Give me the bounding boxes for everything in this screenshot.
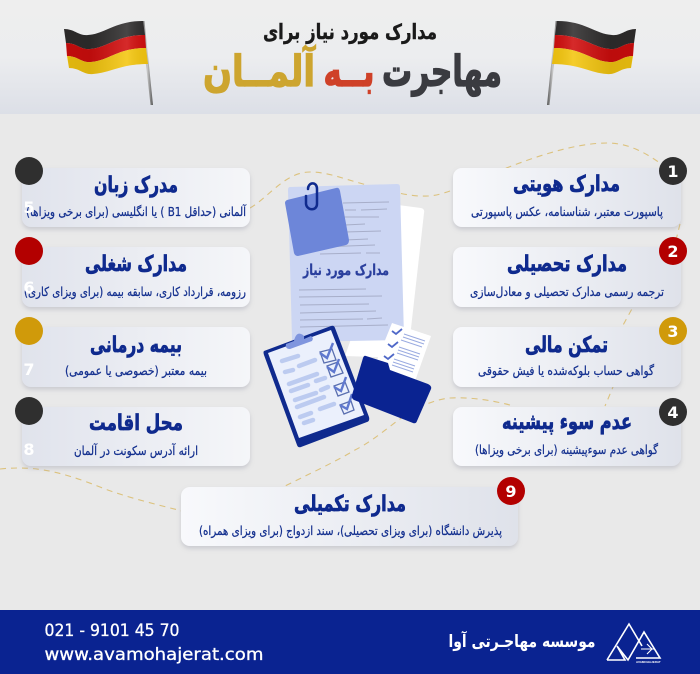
card 1: identity documents: [453, 157, 687, 227]
icon: paperclip: [306, 183, 317, 209]
card 7: health insurance: بیمه درمانی: [90, 333, 182, 358]
website: www.avamohajerat.com: [44, 645, 264, 665]
white back sheet: [345, 205, 424, 358]
card 4: no criminal record: عدم سوء پیشینه: [502, 410, 632, 435]
card 2: educational documents: ترجمه رسمی مدارک تحصیلی و معادل‌سازی: [470, 284, 664, 300]
card 7: health insurance: 7: [23, 360, 35, 379]
card 6: employment documents: 6: [23, 278, 35, 297]
checklist paper: [373, 323, 431, 384]
header band: [0, 0, 700, 114]
card 5: language certificate: [15, 157, 250, 227]
card 9: supplementary documents: 9: [505, 482, 517, 501]
card 4: no criminal record: 4: [667, 403, 679, 422]
heading: main title: [203, 45, 502, 97]
card 3: financial means: گواهی حساب بلوکه‌شده یا فیش حقوقی: [478, 363, 654, 379]
institute name: موسسه مهاجـرتی آوا: [448, 630, 596, 652]
card 3: financial means: [453, 317, 687, 387]
card 7: health insurance: بیمه معتبر (خصوصی یا عمومی): [65, 363, 207, 379]
icon: right German flag: [547, 21, 636, 105]
folder: [352, 356, 431, 423]
card 8: place of residence: ارائه آدرس سکونت در آلمان: [74, 443, 198, 459]
card 4: no criminal record: [453, 398, 687, 466]
card 9: supplementary documents: [181, 477, 525, 546]
card 5: language certificate: 5: [23, 198, 35, 217]
card 1: identity documents: پاسپورت معتبر، شناسنامه، عکس پاسپورتی: [471, 204, 663, 220]
clipboard: [264, 326, 369, 447]
card 6: employment documents: رزومه، قرارداد کاری، سابقه بیمه (برای ویزای کاری): [24, 284, 246, 300]
card 6: employment documents: [15, 237, 250, 307]
card 3: financial means: تمکن مالی: [525, 333, 608, 358]
card 6: employment documents: مدارک شغلی: [85, 252, 187, 277]
card 1: identity documents: 1: [667, 162, 679, 181]
card 8: place of residence: محل اقامت: [89, 411, 183, 436]
document label: مدارک مورد نیاز: [302, 261, 389, 279]
card 8: place of residence: 8: [23, 440, 35, 459]
blue document sheet: [288, 184, 404, 342]
card 2: educational documents: 2: [667, 242, 679, 261]
footer band: [0, 610, 700, 674]
icon: left German flag: [64, 21, 153, 105]
contact phone: 021 - 9101 45 70: [44, 621, 180, 641]
card 2: educational documents: مدارک تحصیلی: [507, 252, 627, 277]
card 9: supplementary documents: پذیرش دانشگاه (برای ویزای تحصیلی)، سند ازدواج (برای ویزای همراه): [199, 523, 502, 539]
heading: subtitle: مدارک مورد نیاز برای: [263, 20, 437, 44]
card 1: identity documents: مدارک هویتی: [513, 172, 620, 197]
heading: main title: آلمــان: [203, 45, 316, 97]
card 9: supplementary documents: مدارک تکمیلی: [294, 492, 406, 517]
card 7: health insurance: [15, 317, 250, 387]
card 2: educational documents: [453, 237, 687, 307]
heading: main title: مهاجرت: [382, 47, 502, 97]
icon: logo: AVAMOHAJERAT: [636, 660, 661, 664]
card 5: language certificate: مدرک زبان: [94, 173, 178, 198]
illustration: documents: [264, 183, 431, 447]
card 3: financial means: 3: [667, 322, 679, 341]
card 8: place of residence: [15, 397, 250, 466]
card 5: language certificate: آلمانی (حداقل B1 ) یا انگلیسی (برای برخی ویزاها): [26, 204, 246, 220]
icon: logo: [607, 624, 661, 664]
heading: main title: بــه: [324, 47, 374, 97]
card 4: no criminal record: گواهی عدم سوءپیشینه (برای برخی ویزاها): [475, 442, 658, 458]
sticky note: [285, 188, 349, 256]
